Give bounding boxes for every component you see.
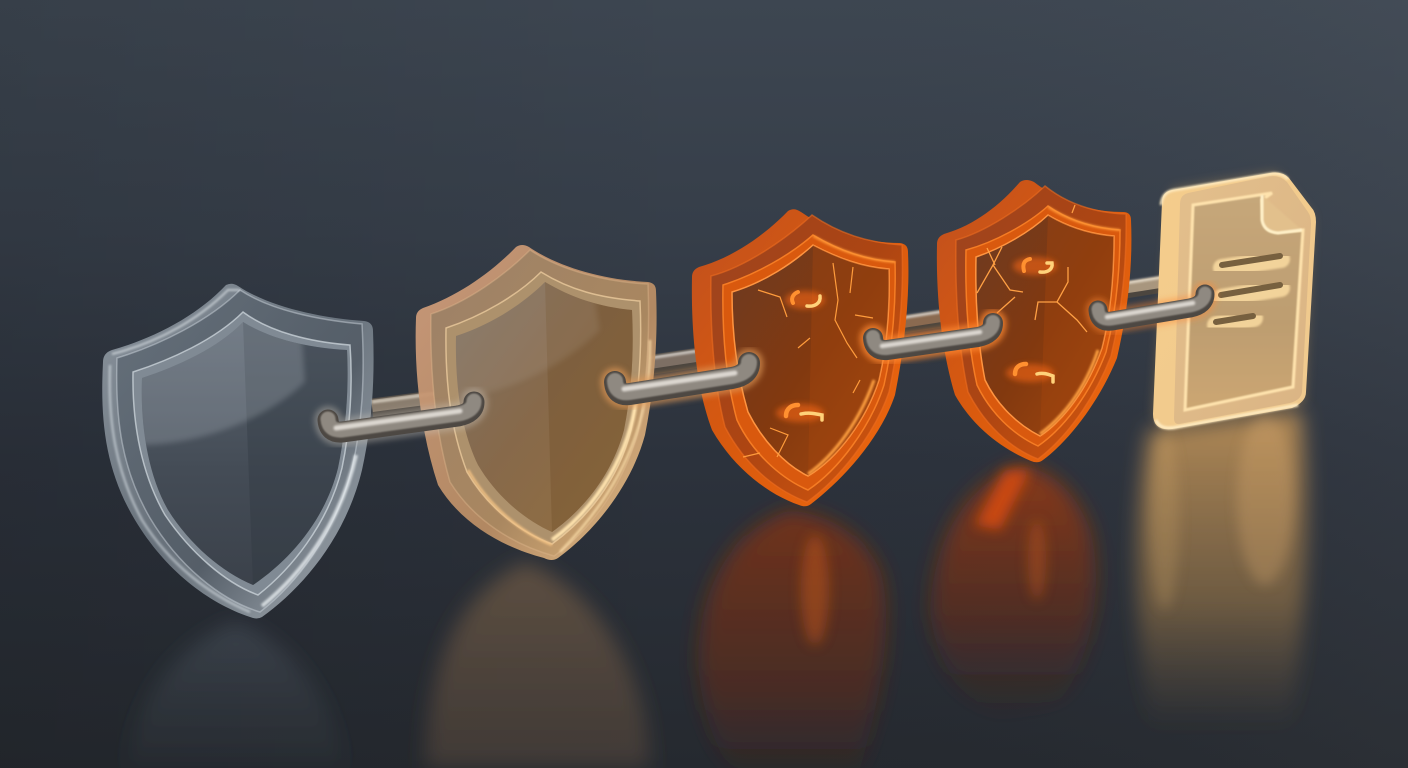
front face: [1174, 176, 1311, 424]
reflection: clear shield: [125, 622, 345, 768]
reflection: amber shield: [425, 562, 650, 768]
cracks: [743, 263, 873, 457]
chain link front: shield 1 to 2: [328, 401, 474, 432]
reflections on the floor: [125, 410, 1306, 768]
reflection: orange shield: [698, 510, 886, 768]
chain link back bar: shield 3 to 4: [900, 311, 945, 325]
reflection glows: [801, 415, 1293, 645]
chain link back bar: shield 4 to document: [1125, 276, 1170, 290]
plate: [976, 215, 1114, 436]
cracks: [977, 205, 1087, 332]
glow sparks: [1006, 257, 1057, 382]
reflection: document: [1138, 410, 1306, 730]
shield 2: amber glass: [416, 245, 657, 560]
shield 1: clear glass: [102, 284, 374, 618]
plate with centre facet: [142, 322, 348, 585]
shield 3: orange cracked: [692, 209, 908, 506]
plate with centre facet: [456, 282, 633, 532]
chain link back bar: shield 2 to 3: [650, 349, 710, 365]
plate: [732, 245, 889, 476]
chain link back bar: shield 1 to 2: [372, 393, 440, 408]
document: glowing amber page: [1153, 173, 1316, 429]
text lines: [1216, 256, 1281, 325]
shield 4: orange heavily cracked: [937, 180, 1131, 462]
page corner fold: [1262, 195, 1302, 233]
chain link front: shield 2 to 3: [615, 362, 749, 394]
inner page outline with folded corner: [1185, 193, 1303, 410]
chain link front: shield 3 to 4: [873, 322, 993, 350]
reflection: cracked shield: [930, 465, 1096, 715]
glow sparks: [776, 291, 825, 422]
chain link front: shield 4 to document: [1098, 293, 1205, 321]
glow halo: [1154, 173, 1311, 429]
